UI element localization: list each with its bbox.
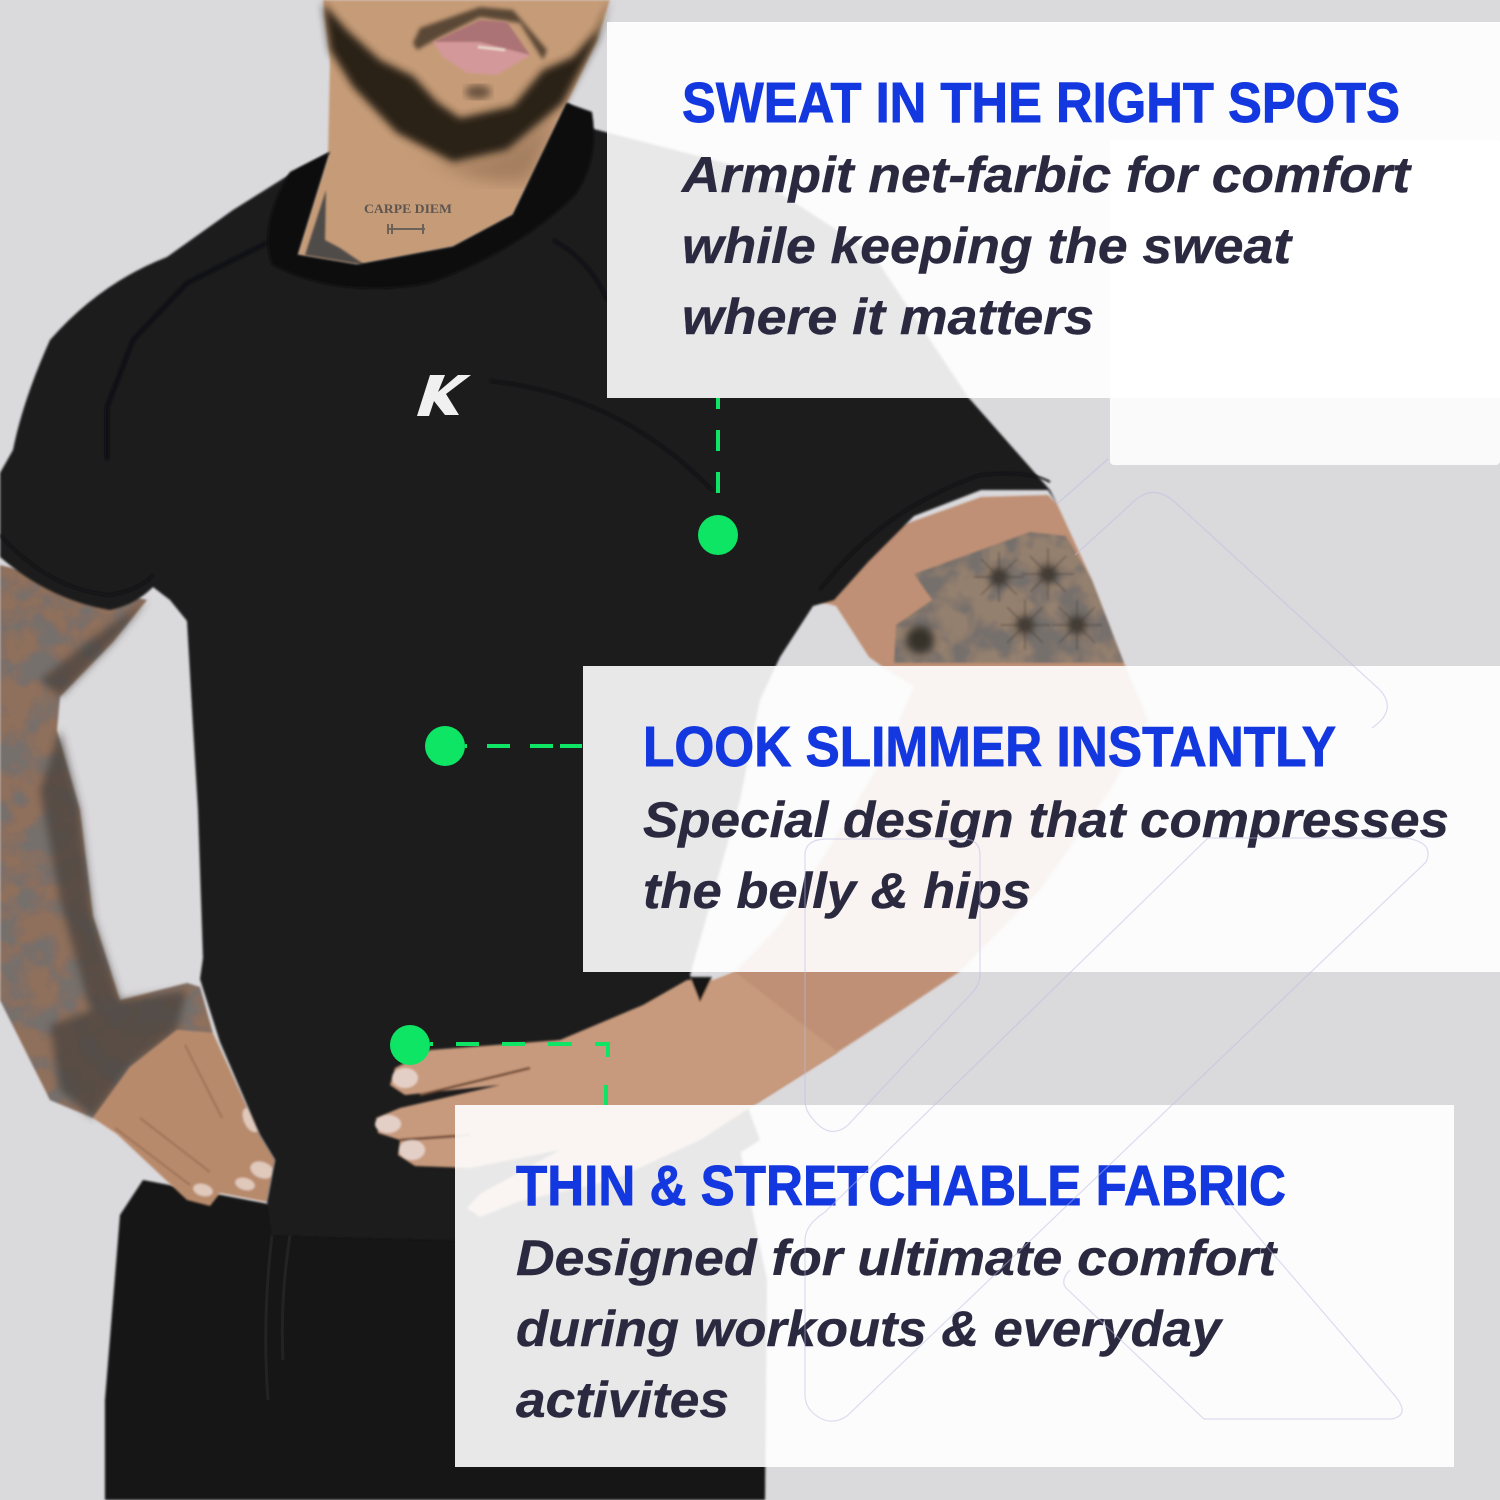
heading: LOOK SLIMMER INSTANTLY bbox=[643, 715, 1336, 779]
pants bbox=[105, 1150, 767, 1500]
panel: sweat bbox=[607, 22, 1500, 465]
panel background bbox=[607, 22, 1500, 465]
body text: where it matters bbox=[682, 289, 1094, 345]
photo: man in black t-shirt bbox=[0, 0, 1148, 1500]
lips bbox=[433, 20, 530, 75]
body text bbox=[680, 147, 1412, 345]
neck tattoo bbox=[305, 190, 452, 265]
neck and face bbox=[297, 0, 610, 265]
body text: during workouts & everyday bbox=[516, 1301, 1223, 1357]
right hand bbox=[375, 972, 838, 1217]
panel: fabric bbox=[455, 1105, 1454, 1467]
heading: THIN & STRETCHABLE FABRIC bbox=[516, 1154, 1286, 1218]
skin bbox=[297, 0, 610, 265]
body text: the belly & hips bbox=[643, 863, 1031, 919]
beard bbox=[323, 0, 610, 162]
neck tattoo: CARPE DIEM bbox=[364, 201, 452, 216]
body text: while keeping the sweat bbox=[682, 218, 1294, 274]
jaw shadow bbox=[400, 110, 560, 182]
body text: Designed for ultimate comfort bbox=[516, 1230, 1279, 1286]
t-shirt bbox=[0, 103, 1057, 1240]
right upper arm and forearm bbox=[640, 495, 1148, 1120]
callout: belly marker bbox=[425, 726, 582, 766]
body text bbox=[643, 792, 1449, 919]
seams bbox=[0, 240, 1050, 595]
panel: slimmer bbox=[583, 666, 1500, 972]
body text: activites bbox=[516, 1372, 729, 1428]
moustache bbox=[413, 7, 547, 60]
panel background bbox=[455, 1105, 1454, 1467]
faint logo watermark bbox=[805, 459, 1428, 1421]
callout: armpit marker bbox=[698, 398, 738, 555]
shirt logo bbox=[417, 375, 471, 416]
heading: SWEAT IN THE RIGHT SPOTS bbox=[682, 71, 1400, 135]
body text: Armpit net-farbic for comfort bbox=[680, 147, 1412, 203]
tattoo: geometric sleeve bbox=[894, 532, 1124, 663]
soul patch bbox=[465, 85, 491, 99]
collar bbox=[268, 103, 594, 289]
panel background bbox=[583, 666, 1500, 972]
body text: Special design that compresses bbox=[643, 792, 1449, 848]
callout: fabric marker bbox=[390, 1025, 608, 1105]
left arm with tattoos bbox=[0, 565, 276, 1206]
body text bbox=[516, 1230, 1279, 1428]
